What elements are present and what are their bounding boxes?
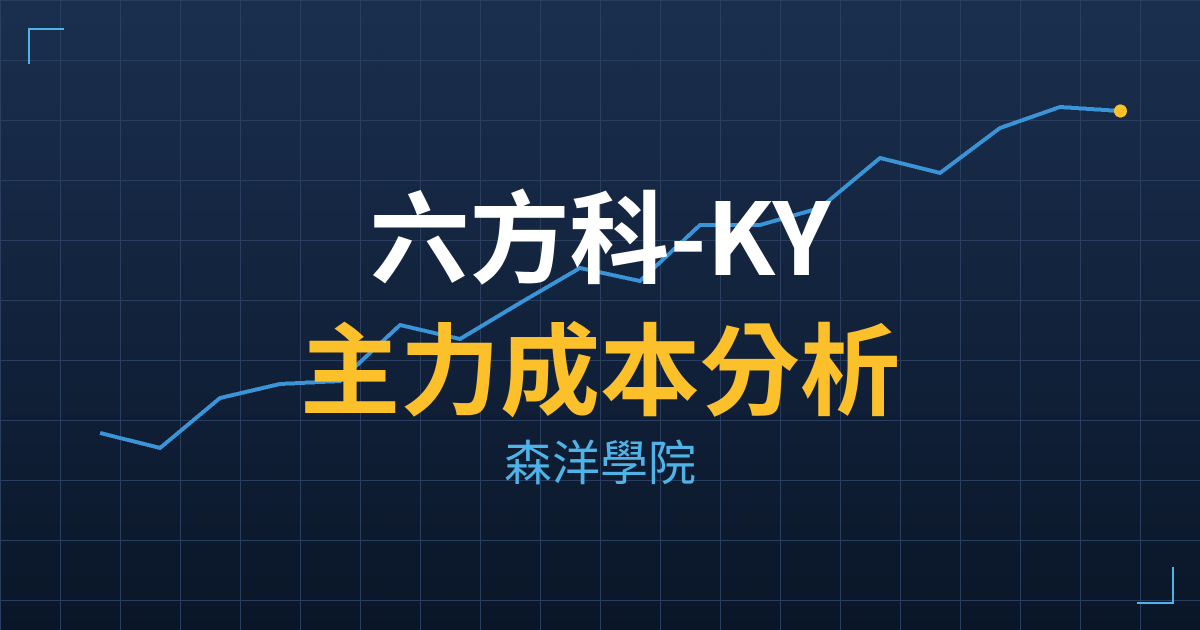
line chart: price trend xyxy=(100,104,1127,448)
subtitle: publisher: 森洋學院 xyxy=(504,424,696,494)
corner bracket: top left xyxy=(29,29,64,64)
heading: main force cost analysis: 主力成本分析 xyxy=(300,291,900,436)
chart end point marker xyxy=(1114,104,1127,118)
corner bracket: bottom right xyxy=(1137,567,1173,603)
title: company name: 六方科-KY xyxy=(370,159,830,304)
